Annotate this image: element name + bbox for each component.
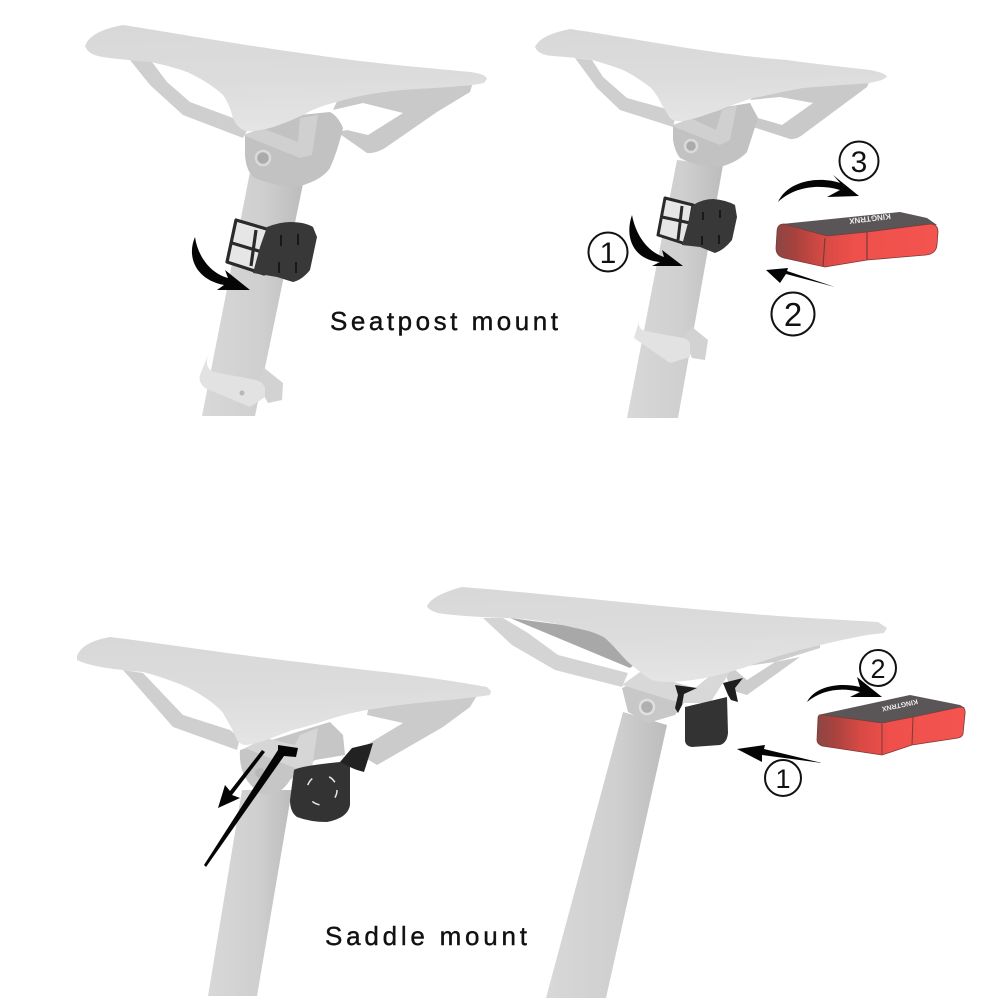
arrow: step 3 [778,175,859,202]
mount: strap bands [658,198,693,244]
marker 1 [588,232,628,272]
panel: seatpost mount, with light [535,29,938,418]
marker 2: 2 [870,654,886,684]
arrow: strap direction [192,237,250,290]
saddle [427,587,887,682]
marker 1: 1 [600,237,616,270]
panel: seatpost mount, saddle only [85,25,487,416]
marker 1 [765,760,801,796]
collar clamp [200,355,283,407]
tail light [776,211,938,267]
left saddle rail [483,618,628,687]
seatpost [546,712,667,998]
right saddle rail [333,82,473,153]
arrow: long black strap [204,745,298,867]
panel: saddle mount, removing strap [77,637,491,996]
tail light: KINGTRNX [881,697,918,712]
black saddle mount [675,678,743,747]
saddle [85,25,487,131]
clamp head [245,112,343,186]
tail light: KINGTRNX [848,211,891,226]
plate slots [702,210,720,245]
mount: strap bands [227,220,270,274]
left saddle rail [123,670,240,750]
arrow: step 1 [737,745,822,763]
arrow: step 2 [807,677,882,702]
black saddle clip [290,743,373,822]
marker 2: 2 [784,296,802,333]
panel: saddle mount, with light [427,587,965,998]
clamp head [622,680,690,723]
clamp head [673,103,758,167]
mount: black plate [253,222,317,282]
marker 1: 1 [775,764,791,794]
shadowed saddle underside [510,618,640,668]
marker 3 [840,142,878,180]
label: Saddle mount: Saddle mount [325,921,528,951]
marker 2 [860,650,896,686]
saddle [77,637,491,745]
arrow: step 2 [766,268,835,287]
plate slots [279,234,298,273]
label: Seatpost mount: Seatpost mount [330,306,559,336]
clamp head [240,722,345,794]
left saddle rail [130,60,250,138]
seatpost [208,790,292,996]
marker 3: 3 [851,146,867,179]
collar clamp [634,318,708,363]
right saddle rail [345,694,478,765]
saddle [535,29,887,121]
marker 2 [772,292,814,336]
seatpost [627,160,723,418]
right saddle rail [750,80,870,139]
right saddle rail [725,642,820,695]
mount: black plate [682,199,737,253]
arrow: strap pull [218,750,265,808]
seatpost [202,172,303,416]
left saddle rail [575,58,676,127]
tail light [817,695,965,755]
arrow: step 1 [629,215,683,266]
